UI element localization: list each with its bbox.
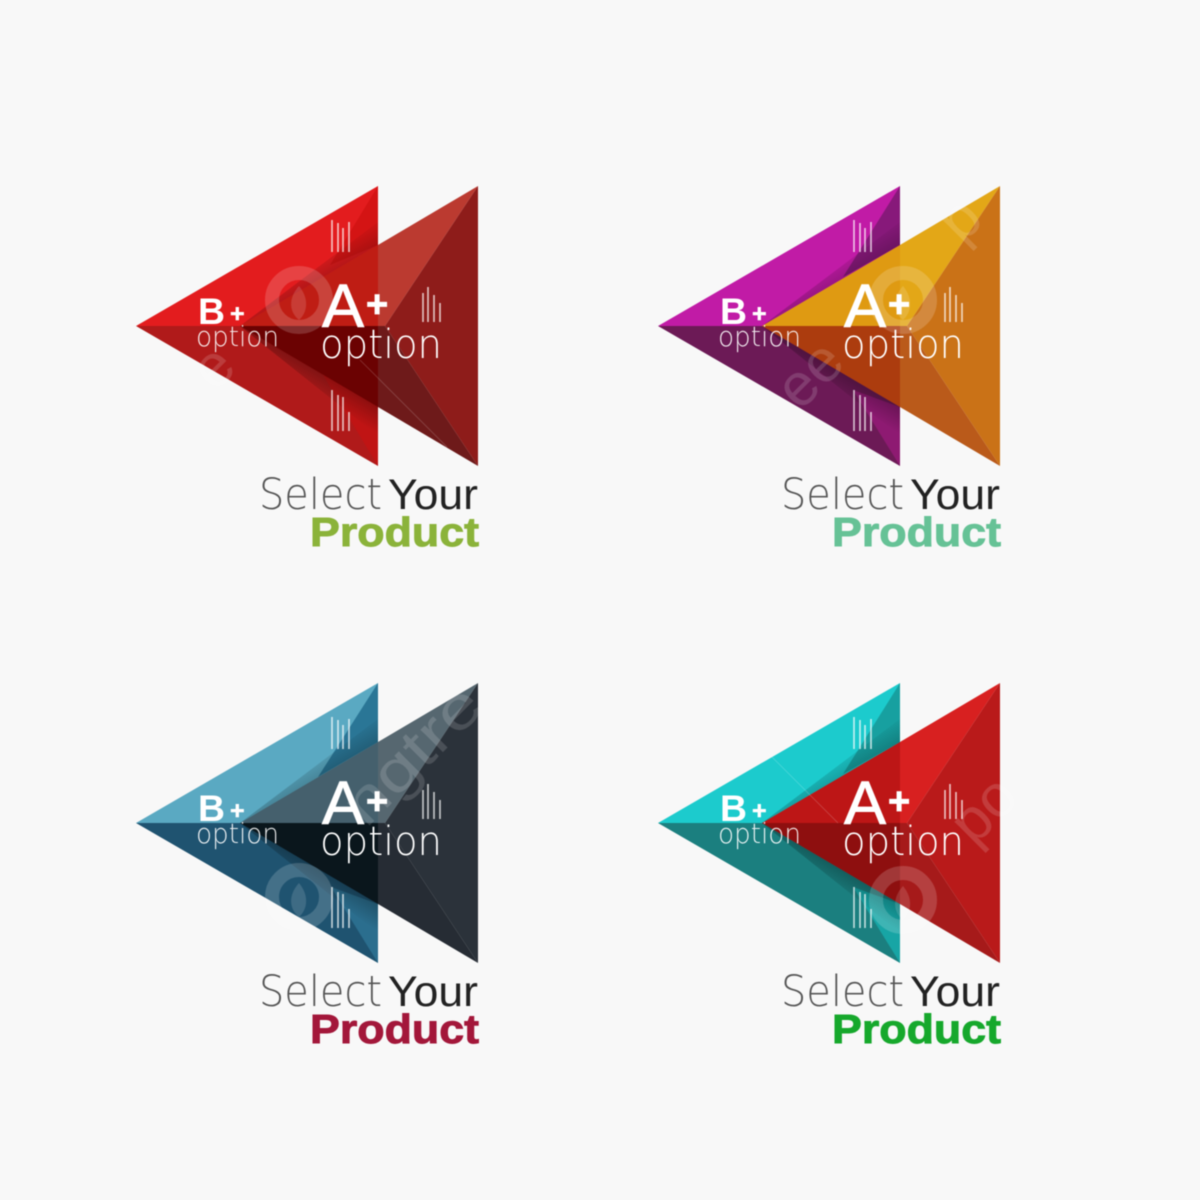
heading bbox=[781, 470, 1001, 555]
B+ label: B bbox=[198, 788, 225, 829]
watermark: ngtre bbox=[328, 671, 495, 838]
watermark bbox=[177, 273, 447, 447]
heading: Your bbox=[388, 968, 478, 1016]
back triangle faces bbox=[658, 683, 900, 963]
watermark bbox=[272, 671, 495, 924]
panel: teal option bbox=[658, 683, 1030, 1052]
heading: Select bbox=[781, 470, 904, 520]
back triangle faces bbox=[658, 186, 900, 466]
A plus: + bbox=[888, 781, 910, 823]
large option: option bbox=[320, 322, 442, 368]
front triangle faces bbox=[240, 683, 478, 963]
A plus: + bbox=[366, 284, 388, 326]
heading: Select bbox=[259, 470, 382, 520]
heading: Select bbox=[259, 967, 382, 1017]
watermark bbox=[768, 753, 1030, 927]
back triangle faces bbox=[136, 186, 378, 466]
A+ label: A bbox=[322, 769, 364, 837]
large option: option bbox=[842, 322, 964, 368]
heading: Select bbox=[781, 967, 904, 1017]
front triangle faces bbox=[240, 186, 478, 466]
A+ label: A bbox=[322, 272, 364, 340]
front triangle faces bbox=[762, 683, 1000, 963]
large option: option bbox=[842, 819, 964, 865]
heading bbox=[259, 967, 479, 1052]
A+ label: A bbox=[844, 272, 886, 340]
heading: Your bbox=[910, 471, 1000, 519]
watermark: p bbox=[924, 183, 995, 254]
heading: Product bbox=[832, 509, 1001, 555]
back triangle faces bbox=[136, 683, 378, 963]
heading: Product bbox=[310, 509, 479, 555]
bars bbox=[332, 220, 440, 431]
heading bbox=[259, 470, 479, 555]
heading bbox=[781, 967, 1001, 1052]
heading: Your bbox=[388, 471, 478, 519]
watermark: e bbox=[177, 331, 248, 402]
panel: purple option bbox=[658, 183, 1001, 555]
B plus: + bbox=[230, 300, 245, 328]
bars bbox=[332, 717, 440, 928]
A plus: + bbox=[366, 781, 388, 823]
front triangle faces bbox=[762, 186, 1000, 466]
watermark: po bbox=[936, 762, 1030, 856]
panel: blue option bbox=[136, 671, 495, 1052]
watermark: ee bbox=[762, 327, 856, 421]
B+ label: B bbox=[720, 291, 747, 332]
small option: option bbox=[718, 817, 801, 850]
watermark bbox=[762, 183, 995, 421]
large option: option bbox=[320, 819, 442, 865]
small option: option bbox=[196, 817, 279, 850]
B plus: + bbox=[752, 300, 767, 328]
heading: Product bbox=[310, 1006, 479, 1052]
bars bbox=[854, 220, 962, 431]
A+ label: A bbox=[844, 769, 886, 837]
bars bbox=[854, 717, 962, 928]
B plus: + bbox=[230, 797, 245, 825]
heading: Your bbox=[910, 968, 1000, 1016]
A plus: + bbox=[888, 284, 910, 326]
B+ label: B bbox=[720, 788, 747, 829]
B+ label: B bbox=[198, 291, 225, 332]
B plus: + bbox=[752, 797, 767, 825]
panel: red option bbox=[136, 186, 479, 555]
small option: option bbox=[718, 320, 801, 353]
heading: Product bbox=[832, 1006, 1001, 1052]
small option: option bbox=[196, 320, 279, 353]
